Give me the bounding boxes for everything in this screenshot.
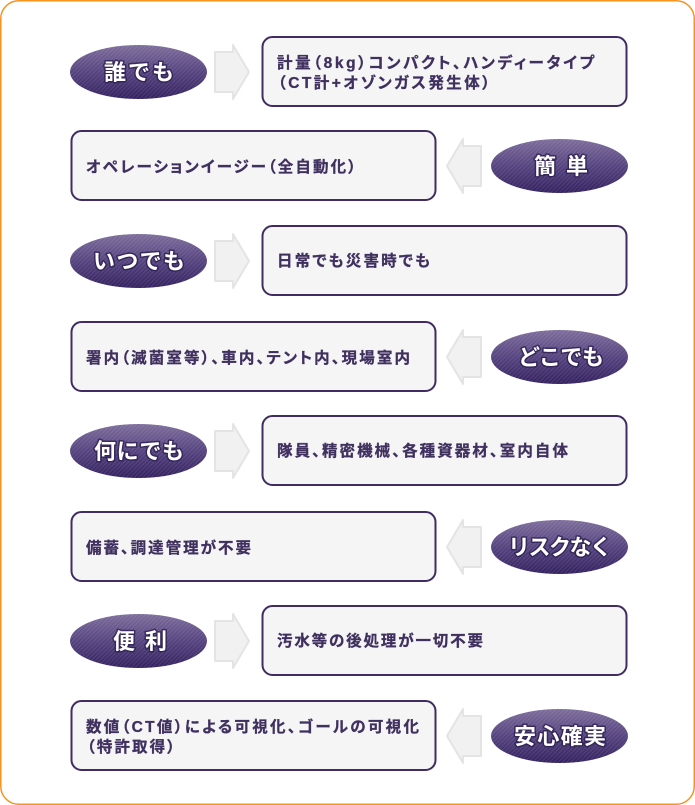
box: 隊員 [262, 416, 626, 485]
oval: どこでも: どこでも [518, 345, 604, 370]
row 3: いつでも [70, 226, 626, 295]
arrow left [447, 330, 481, 384]
row 7: 便利 [70, 606, 626, 675]
box: 数値: 数値（CT値）による可視化、ゴールの可視化 [86, 717, 419, 736]
row 5: 何にでも [70, 416, 626, 485]
arrow left [447, 709, 481, 763]
box: 署内: 署内（滅菌室等）、車内、テント内、現場室内 [86, 348, 410, 367]
row 4: どこでも [72, 322, 628, 391]
arrow right [215, 45, 249, 99]
box: 数値 [72, 701, 436, 770]
oval: 簡単: 簡 単 [534, 154, 588, 179]
box: 備蓄: 備蓄、調達管理が不要 [86, 538, 251, 557]
arrow right [215, 234, 249, 288]
box: 隊員: 隊員、精密機械、各種資器材、室内自体 [277, 441, 568, 460]
oval: 便利 [70, 614, 207, 668]
oval: 誰でも [70, 45, 207, 99]
oval: 便利: 便 利 [113, 629, 167, 654]
box: オペレーションイージー: オペレーションイージー（全自動化） [86, 157, 356, 176]
box: 計量: （CT計+オゾンガス発生体） [278, 74, 490, 92]
box: 署内 [72, 322, 436, 391]
row 6: リスクなく [72, 512, 628, 581]
arrow left [447, 520, 481, 574]
oval: 簡単 [491, 139, 628, 193]
arrow right [215, 614, 249, 668]
row 1: 誰でも [70, 37, 626, 106]
arrow left [447, 139, 481, 193]
oval: リスクなく [491, 520, 628, 574]
box: 計量: 計量（8kg）コンパクト、ハンディータイプ [277, 53, 595, 72]
arrow right [215, 424, 249, 478]
oval: リスクなく: リスクなく [508, 535, 612, 560]
box: 日常でも災害時でも: 日常でも災害時でも [277, 251, 430, 270]
row 8: 安心確実 [72, 701, 628, 770]
oval: いつでも [70, 234, 207, 288]
oval: どこでも [491, 330, 628, 384]
row 2: 簡単 [72, 131, 628, 200]
oval: 誰でも: 誰でも [104, 60, 174, 85]
oval: 何にでも: 何にでも [94, 439, 184, 464]
oval: 何にでも [70, 424, 207, 478]
oval: いつでも: いつでも [93, 249, 185, 274]
box: 数値: （特許取得） [87, 737, 175, 756]
box: 備蓄 [72, 512, 436, 581]
box: 汚水 [262, 606, 626, 675]
box: 汚水: 汚水等の後処理が一切不要 [277, 631, 483, 650]
oval: 安心確実 [491, 709, 628, 763]
box: オペレーションイージー [72, 131, 436, 200]
box: 計量 [262, 37, 626, 106]
box: 日常でも災害時でも [262, 226, 626, 295]
oval: 安心確実: 安心確実 [514, 724, 606, 749]
